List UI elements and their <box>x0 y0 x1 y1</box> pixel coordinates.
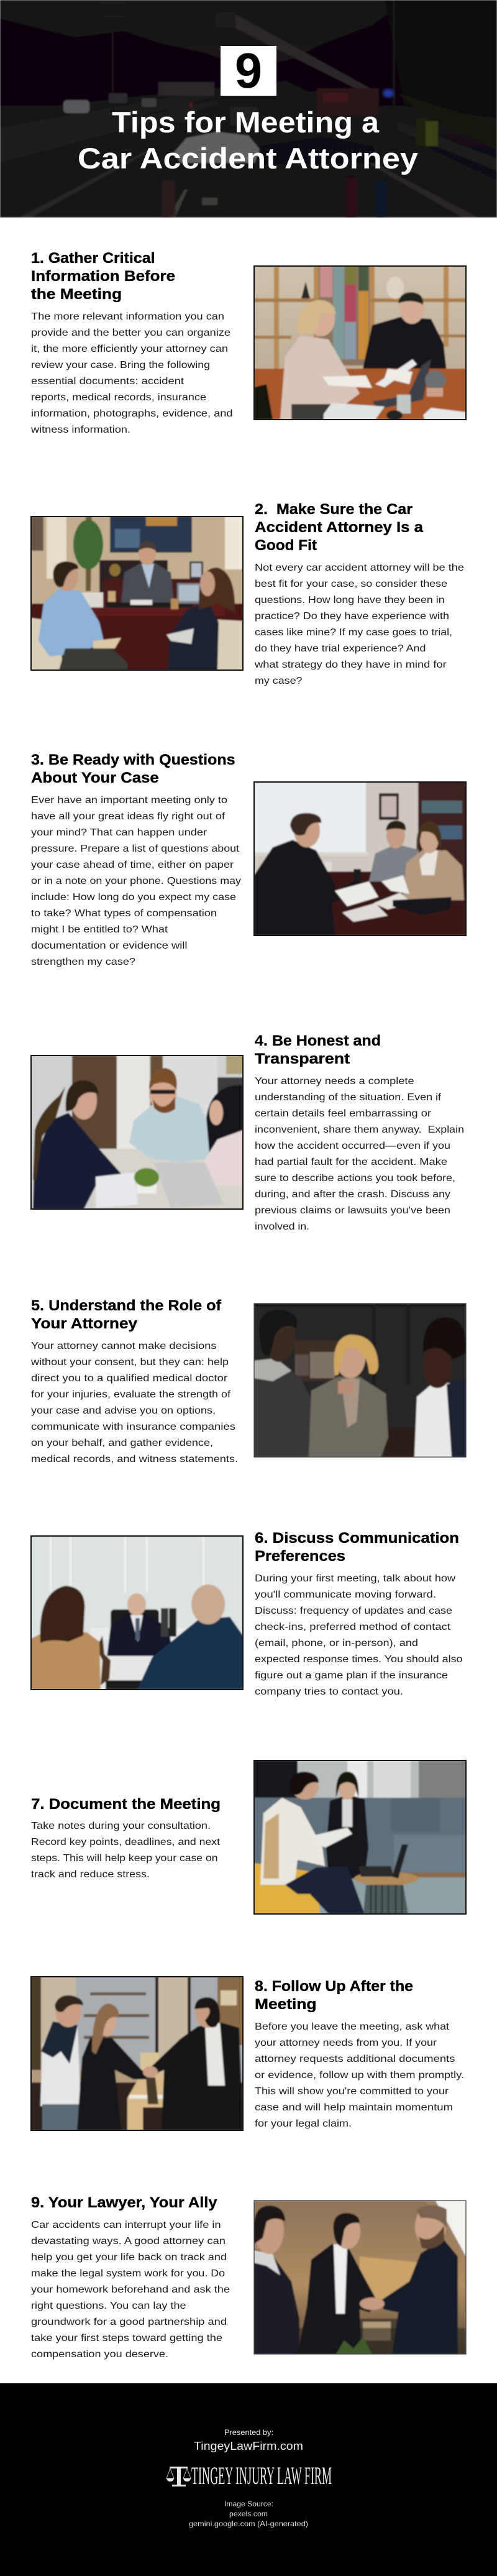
body text: tip 3: or in a note on your phone. Questions may <box>31 876 241 886</box>
body text: tip 5: Your attorney cannot make decisions <box>31 1341 216 1351</box>
body text: tip 2 <box>254 563 464 686</box>
body text: tip 6: figure out a game plan if the insurance <box>255 1670 448 1681</box>
logo: Tingey Injury Law Firm <box>166 2462 332 2490</box>
body text: tip 3: documentation or evidence will <box>31 941 188 951</box>
presented by credit <box>194 2428 303 2452</box>
body text: tip 4: certain details feel embarrassing or <box>255 1108 432 1119</box>
body text: tip 6: (email, phone, or in-person), and <box>255 1638 418 1649</box>
body text: tip 1: witness information. <box>30 425 130 435</box>
body text: tip 8: attorney requests additional documents <box>255 2054 455 2064</box>
body text: tip 9: compensation you deserve. <box>31 2349 168 2360</box>
panel: tip 7 document the meeting <box>31 1760 466 1914</box>
panel: tip 1 gather critical information <box>30 250 466 435</box>
body text: tip 3: include: How long do you expect my case <box>31 892 236 903</box>
body text: tip 3: your mind? That can happen under <box>31 827 207 838</box>
heading: tip 4 <box>255 1033 381 1067</box>
image source credits <box>189 2500 308 2528</box>
body text: tip 1: reports, medical records, insurance <box>31 392 206 403</box>
body text: tip 6: you'll communicate moving forward. <box>255 1589 436 1600</box>
body text: tip 3 <box>31 795 241 967</box>
body text: tip 1 <box>30 311 233 435</box>
heading: tip 9: 9. Your Lawyer, Your Ally <box>31 2194 217 2211</box>
body text: tip 2: questions. How long have they been in <box>255 595 445 605</box>
heading: tip 2 <box>255 501 424 554</box>
body text: tip 5: communicate with insurance companies <box>31 1422 235 1432</box>
title <box>78 106 418 175</box>
heading: tip 1: Information Before <box>31 268 175 285</box>
heading: tip 3: 3. Be Ready with Questions <box>31 752 235 768</box>
body text: tip 1: information, photographs, evidence, and <box>31 408 232 419</box>
body text: tip 1: provide and the better you can organize <box>31 328 230 338</box>
number badge: 9 <box>235 43 262 98</box>
body text: tip 4: inconvenient, share them anyway. Explain <box>255 1125 464 1135</box>
panel: tip 9 your lawyer, your ally <box>31 2194 466 2360</box>
presented by credit: Presented by: <box>224 2428 273 2437</box>
body text: tip 7 <box>31 1821 221 1880</box>
body text: tip 4: previous claims or lawsuits you've been <box>255 1205 450 1216</box>
photo: attorney reviewing papers with couple <box>254 782 466 936</box>
body text: tip 6: Discuss: frequency of updates and case <box>255 1606 452 1616</box>
body text: tip 3: might I be entitled to? What <box>31 924 168 935</box>
body text: tip 1: The more relevant information you can <box>31 311 224 322</box>
body text: tip 3: Ever have an important meeting only to <box>31 795 227 806</box>
heading: tip 1: 1. Gather Critical <box>31 250 155 267</box>
body text: tip 2: best fit for your case, so consider these <box>255 579 447 589</box>
heading: tip 2: 2. Make Sure the Car <box>255 501 413 518</box>
body text: tip 2: practice? Do they have experience with <box>255 611 449 622</box>
heading: tip 8: Meeting <box>255 1996 317 2013</box>
heading: tip 3 <box>31 752 235 786</box>
heading: tip 6: Preferences <box>255 1548 345 1565</box>
heading: tip 1 <box>31 250 175 303</box>
body text: tip 2: cases like mine? If my case goes to trial, <box>255 627 452 638</box>
body text: tip 4: Your attorney needs a complete <box>255 1076 414 1087</box>
heading: tip 8 <box>255 1978 413 2013</box>
image source credits: Image Source: <box>224 2500 273 2508</box>
body text: tip 8: Before you leave the meeting, ask what <box>255 2022 450 2032</box>
heading: tip 5: Your Attorney <box>31 1315 138 1332</box>
photo: lawyer with man and woman at laptop <box>31 1056 243 1209</box>
body text: tip 1: it, the more efficiently your attorney can <box>31 344 228 354</box>
body text: tip 4: how the accident occurred—even if you <box>255 1141 450 1151</box>
body text: tip 5: direct you to a qualified medical doctor <box>31 1373 228 1384</box>
body text: tip 8: case and will help maintain momentum <box>255 2102 453 2113</box>
heading: tip 7: 7. Document the Meeting <box>31 1796 221 1813</box>
body text: tip 5: without your consent, but they can: help <box>30 1357 229 1368</box>
body text: tip 5 <box>30 1341 238 1465</box>
image source credits: gemini.google.com (AI-generated) <box>189 2519 308 2528</box>
body text: tip 3: pressure. Prepare a list of questions about <box>31 844 240 854</box>
body text: tip 6: During your first meeting, talk about how <box>255 1573 456 1584</box>
heading: tip 2: Accident Attorney Is a <box>255 519 424 536</box>
body text: tip 4: sure to describe actions you took before, <box>255 1173 455 1184</box>
photo: men in suits shaking hands <box>254 2201 466 2354</box>
heading: tip 5 <box>31 1297 222 1332</box>
body text: tip 8: your attorney needs from you. If your <box>255 2038 437 2048</box>
panel: tip 6 discuss communication preferences <box>31 1530 463 1697</box>
heading: tip 3: About Your Case <box>31 770 159 786</box>
body text: tip 8: This will show you're committed to your <box>255 2086 449 2097</box>
body text: tip 7: track and reduce stress. <box>31 1869 150 1880</box>
body text: tip 6 <box>255 1573 463 1697</box>
body text: tip 4: during, and after the crash. Discuss any <box>255 1189 450 1200</box>
heading: tip 5: 5. Understand the Role of <box>31 1297 222 1314</box>
body text: tip 7: Take notes during your consultation. <box>31 1821 211 1831</box>
body text: tip 5: for your injuries, evaluate the strength of <box>31 1389 231 1400</box>
panel: tip 3 be ready with questions <box>31 752 466 967</box>
body text: tip 3: your case ahead of time, either on paper <box>31 860 234 870</box>
body text: tip 4 <box>255 1076 464 1232</box>
image source credits: pexels.com <box>229 2509 268 2518</box>
body text: tip 5: on your behalf, and gather evidence, <box>31 1438 213 1448</box>
body text: tip 9 <box>31 2220 230 2360</box>
body text: tip 2: do they have trial experience? And <box>255 643 426 654</box>
body text: tip 9: groundwork for a good partnership and <box>31 2317 227 2327</box>
title: Tips for Meeting a <box>112 106 380 139</box>
body text: tip 8 <box>255 2022 464 2129</box>
body text: tip 1: review your case. Bring the following <box>31 360 210 370</box>
panel: tip 5 understand the role of your attorney <box>30 1297 466 1465</box>
body text: tip 9: make the legal system work for you. Do <box>31 2268 225 2279</box>
panel: tip 8 follow up after the meeting <box>31 1977 464 2130</box>
body text: tip 9: devastating ways. A good attorney can <box>31 2236 226 2247</box>
footer: TINGEY INJURY LAW FIRM <box>191 2462 332 2490</box>
hero banner <box>0 0 497 218</box>
body text: tip 9: help you get your life back on track and <box>31 2252 227 2263</box>
heading: tip 6: 6. Discuss Communication <box>255 1530 459 1547</box>
panel: tip 4 be honest and transparent <box>31 1033 464 1232</box>
presented by credit: TingeyLawFirm.com <box>194 2440 303 2452</box>
body text: tip 6: expected response times. You should also <box>255 1654 463 1665</box>
photo: three people in dark office <box>254 1304 466 1457</box>
body text: tip 4: involved in. <box>255 1221 309 1232</box>
body text: tip 6: company tries to contact you. <box>255 1686 403 1697</box>
photo: attorney at desk with two clients <box>31 517 243 670</box>
number badge <box>221 43 276 98</box>
heading: tip 4: Transparent <box>255 1051 350 1067</box>
body text: tip 7: steps. This will help keep your case on <box>31 1853 217 1864</box>
heading: tip 6 <box>255 1530 459 1565</box>
body text: tip 9: your homework beforehand and ask the <box>31 2284 230 2295</box>
heading: tip 1: the Meeting <box>31 286 122 303</box>
body text: tip 3: have all your great ideas fly right out of <box>31 811 226 822</box>
heading: tip 4: 4. Be Honest and <box>255 1033 381 1049</box>
photo: two people meeting on grey sofa <box>254 1760 466 1914</box>
body text: tip 7: Record key points, deadlines, and next <box>31 1837 221 1847</box>
body text: tip 6: check-ins, preferred method of contact <box>255 1622 451 1632</box>
heading: tip 2: Good Fit <box>255 537 317 554</box>
body text: tip 2: my case? <box>255 676 303 686</box>
body text: tip 2: what strategy do they have in mind for <box>254 660 447 670</box>
body text: tip 8: for your legal claim. <box>255 2118 352 2129</box>
body text: tip 5: medical records, and witness statements. <box>31 1454 238 1465</box>
body text: tip 3: to take? What types of compensation <box>31 908 217 919</box>
body text: tip 2: Not every car accident attorney will be the <box>255 563 464 573</box>
body text: tip 9: take your first steps toward getting the <box>31 2333 222 2344</box>
footer <box>0 2383 497 2576</box>
photo: woman and man reviewing documents at table <box>254 266 466 420</box>
hero photo: night highway accident scene <box>0 0 497 218</box>
body text: tip 1: essential documents: accident <box>31 376 185 387</box>
body text: tip 4: had partial fault for the accident. Make <box>255 1157 447 1167</box>
body text: tip 4: understanding of the situation. Even if <box>255 1092 442 1103</box>
body text: tip 9: Car accidents can interrupt your life in <box>31 2220 221 2230</box>
body text: tip 5: your case and advise you on options, <box>31 1405 216 1416</box>
body text: tip 9: right questions. You can lay the <box>31 2301 186 2311</box>
title: Car Accident Attorney <box>78 142 418 175</box>
icon: scales of justice <box>166 2467 191 2486</box>
photo: clients shaking hands with attorney <box>31 1977 243 2130</box>
body text: tip 3: strengthen my case? <box>31 957 135 967</box>
body text: tip 8: or evidence, follow up with them promptly. <box>255 2070 464 2081</box>
heading: tip 8: 8. Follow Up After the <box>255 1978 413 1995</box>
photo: attorney across desk from two clients <box>31 1536 243 1690</box>
panel: tip 2 make sure the attorney is a good fit <box>31 501 464 686</box>
